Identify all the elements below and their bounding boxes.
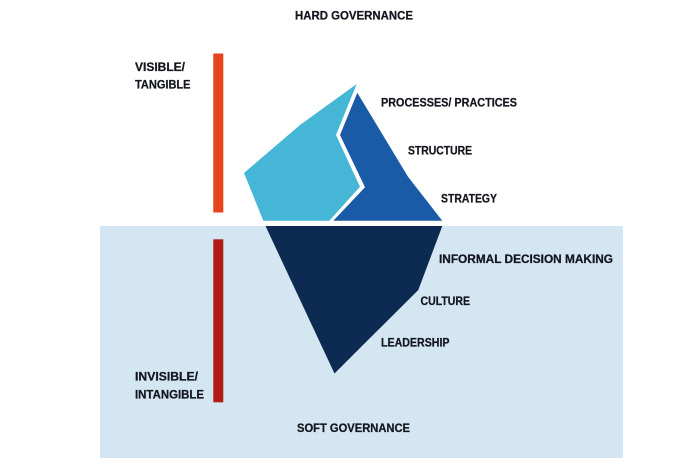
bar: visible tangible <box>213 54 223 212</box>
label: structure: STRUCTURE <box>408 146 472 158</box>
label: informal decision making: INFORMAL DECISION MAKING <box>439 254 613 266</box>
iceberg: light teal tip face <box>244 84 360 221</box>
heading: hard governance: HARD GOVERNANCE <box>295 10 413 22</box>
label: invisible / intangible: INTANGIBLE <box>135 390 204 402</box>
label: invisible / intangible: INVISIBLE/ <box>135 372 199 384</box>
iceberg: blue tip face <box>333 93 442 221</box>
iceberg: navy submerged mass <box>266 226 442 374</box>
heading: soft governance: SOFT GOVERNANCE <box>297 423 410 435</box>
bar: invisible intangible <box>213 239 223 402</box>
label: invisible / intangible <box>135 372 204 402</box>
label: visible / tangible <box>135 62 191 92</box>
label: visible / tangible: TANGIBLE <box>135 80 191 92</box>
panel: underwater soft governance area <box>100 226 623 458</box>
label: visible / tangible: VISIBLE/ <box>135 62 186 74</box>
label: strategy: STRATEGY <box>441 194 497 206</box>
label: culture: CULTURE <box>420 296 470 308</box>
label: processes practices: PROCESSES/ PRACTICES <box>381 98 517 110</box>
label: leadership: LEADERSHIP <box>381 338 450 350</box>
